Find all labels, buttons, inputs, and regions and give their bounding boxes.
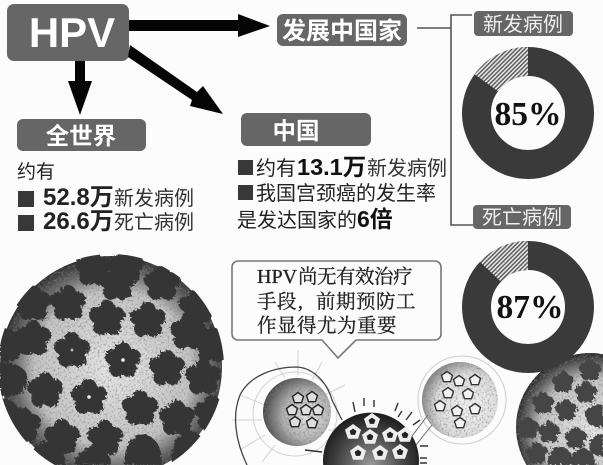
heading: China: 中国 (272, 118, 320, 144)
HPV box (7, 4, 129, 61)
text block: China stats: 新发病例 (367, 157, 447, 180)
text block: world stats (17, 161, 194, 235)
arrow: HPV to world (68, 61, 92, 115)
text block: world stats: 新发病例 (114, 187, 194, 210)
text block: world stats: 死亡病例 (114, 211, 194, 234)
virus: dark sphere (304, 398, 428, 465)
heading: world (17, 119, 146, 151)
donut chart: 87%: 87% (496, 289, 564, 326)
text block: China stats (237, 154, 447, 232)
virus: light outlined sphere (412, 356, 506, 445)
text block: world stats: 约有 (17, 161, 55, 183)
text block: world stats: 26.6万 (43, 208, 114, 235)
heading: world: 全世界 (46, 123, 116, 149)
callout: HPV (257, 266, 298, 288)
text block: China stats: 约有 (256, 157, 296, 180)
callout: 尚无有效治疗 (298, 266, 413, 288)
virus: outlined sphere (232, 350, 346, 465)
callout (232, 261, 441, 358)
donut chart: 85%: 85% (494, 96, 562, 133)
text block: world stats: 52.8万 (43, 184, 114, 211)
text block: China stats: 我国宫颈癌的发生率 (256, 182, 436, 205)
callout: 作显得尤为重要 (257, 315, 397, 337)
donut chart: 87% (476, 241, 580, 358)
connector bracket (417, 15, 475, 225)
text block: China stats: 是发达国家的6倍 (237, 206, 393, 232)
virus: large sphere bottom left (0, 254, 224, 465)
donut chart: 85% (475, 47, 580, 164)
label: new cases: 新发病例 (483, 13, 563, 36)
HPV box: HPV (29, 9, 115, 56)
heading: developing countries: 发展中国家 (282, 18, 402, 45)
virus: sphere bottom right (516, 353, 603, 465)
label: deaths: 死亡病例 (482, 206, 562, 229)
arrow: HPV to developing countries (129, 14, 270, 37)
arrow: HPV to China (128, 45, 223, 114)
callout: 手段,前期预防工 (257, 291, 416, 313)
text block: China stats: 13.1万 (297, 154, 366, 180)
heading: China (241, 113, 371, 146)
